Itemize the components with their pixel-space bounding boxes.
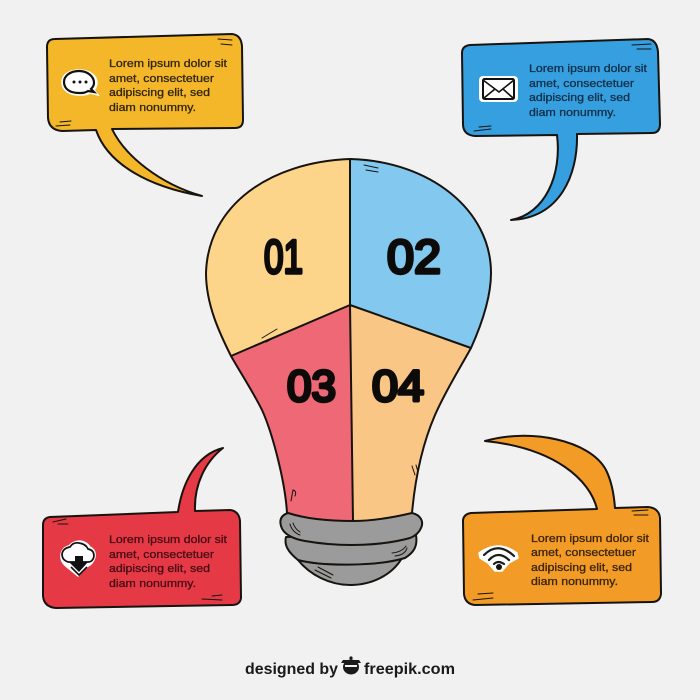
text block: yellow bubble: adipiscing elit, sed (109, 87, 210, 99)
panel: orange speech bubble (463, 436, 661, 605)
text block: orange bubble (531, 533, 649, 588)
light bulb (206, 159, 491, 585)
text block: yellow bubble: diam nonummy. (109, 102, 196, 114)
text block: blue bubble: Lorem ipsum dolor sit (529, 63, 647, 75)
text block: orange bubble: diam nonummy. (531, 576, 618, 588)
text block: yellow bubble: amet, consectetuer (109, 73, 215, 85)
icon: freepik logo (341, 656, 361, 674)
bulb segment 03 (231, 305, 353, 521)
text block: blue bubble: adipiscing elit, sed (529, 92, 630, 104)
text block: orange bubble: adipiscing elit, sed (531, 562, 632, 574)
panel: red speech bubble (43, 448, 241, 608)
bulb screw base (280, 513, 422, 585)
yellow bubble shape (47, 34, 243, 196)
text block: blue bubble: amet, consectetuer (529, 78, 635, 90)
red bubble shape (43, 448, 241, 608)
footer credit (245, 656, 455, 678)
text block: blue bubble: diam nonummy. (529, 107, 616, 119)
icon: wifi (479, 546, 518, 571)
bulb outline (206, 159, 491, 521)
panel: blue speech bubble (462, 39, 660, 220)
icon: chat bubble (62, 70, 98, 95)
text block: red bubble: diam nonummy. (109, 578, 196, 590)
text block: yellow bubble: Lorem ipsum dolor sit (109, 58, 227, 70)
blue bubble shape (462, 39, 660, 220)
bulb segment 04 (350, 305, 471, 521)
text block: orange bubble: Lorem ipsum dolor sit (531, 533, 649, 545)
text block: red bubble: amet, consectetuer (109, 549, 215, 561)
text block: red bubble: Lorem ipsum dolor sit (109, 534, 227, 546)
bulb segment 02 (350, 159, 491, 348)
text block: blue bubble (529, 63, 647, 119)
text block: red bubble (109, 534, 227, 590)
icon: cloud download (61, 541, 95, 576)
orange bubble shape (463, 436, 661, 605)
icon: envelope (479, 76, 518, 102)
panel: yellow speech bubble (47, 34, 243, 196)
bulb sketch marks (262, 165, 418, 501)
text block: orange bubble: amet, consectetuer (531, 547, 637, 559)
number 02: 02 (387, 230, 441, 283)
bulb segment 01 (206, 159, 350, 356)
number 01: 01 (264, 230, 303, 283)
text block: yellow bubble (109, 58, 227, 114)
text block: red bubble: adipiscing elit, sed (109, 563, 210, 575)
designed by text: designed by (245, 661, 338, 678)
freepik.com text: freepik.com (364, 661, 455, 678)
number 04: 04 (372, 362, 424, 411)
number 03: 03 (287, 362, 336, 411)
